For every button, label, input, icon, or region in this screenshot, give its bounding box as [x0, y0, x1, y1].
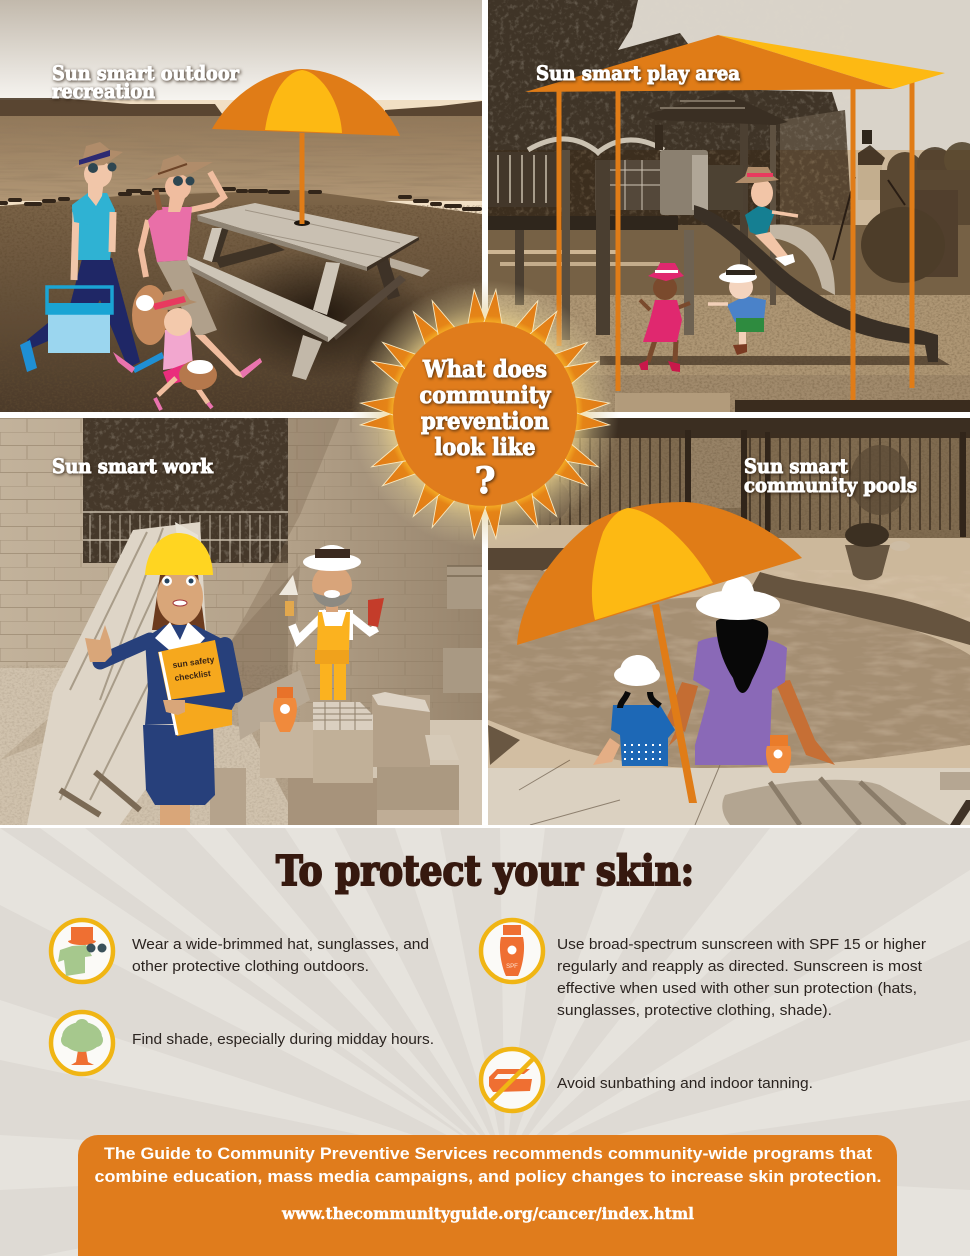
- heading: sun smart community pools: [744, 454, 917, 497]
- banner: community guide recommendation: combine education, mass media campaigns, and policy changes to increase skin protection.: [94, 1168, 882, 1186]
- icon: hat, sunglasses and shirt: [51, 920, 113, 982]
- heading: to protect your skin: To protect your skin:: [276, 847, 694, 895]
- illustration: family with cooler and basket: [20, 142, 262, 410]
- heading: sun smart community pools: community pools: [744, 473, 917, 497]
- text: use sunscreen: [557, 937, 926, 1019]
- text: use sunscreen: regularly and reapply as directed. Sunscreen is most: [557, 959, 922, 975]
- heading: sun smart play area: Sun smart play area: [536, 61, 740, 85]
- illustration: playground structure: [488, 92, 938, 362]
- illustration: woman with hard hat and checklist: sun safety: [172, 654, 215, 670]
- sun badge: what does community prevention look like: prevention: [421, 408, 549, 435]
- heading: sun smart community pools: Sun smart: [744, 454, 849, 478]
- illustration: mother and child under umbrella: [517, 502, 835, 803]
- text: use sunscreen: Use broad-spectrum sunscreen with SPF 15 or higher: [557, 937, 926, 953]
- illustration: orange shade canopy with poles: [525, 35, 945, 400]
- text: wear protective clothing second line: other protective clothing outdoors.: [132, 959, 369, 975]
- panel: sun smart work: [0, 417, 482, 825]
- banner: community guide recommendation: [78, 1135, 897, 1256]
- text: avoid tanning: Avoid sunbathing and indoor tanning.: [557, 1076, 813, 1092]
- illustration: children playing: [639, 167, 798, 372]
- icon: sunscreen bottle: [481, 920, 543, 982]
- icon: shade tree: [51, 1012, 113, 1074]
- panel: sun smart community pools: [470, 418, 970, 825]
- illustration: construction worker: [279, 545, 384, 700]
- icon: sunscreen bottle: SPF: [506, 964, 518, 970]
- photo: stacked clay bricks: [210, 692, 459, 825]
- photo: lake and lawn background: [0, 0, 482, 412]
- heading: sun smart work: Sun smart work: [52, 454, 214, 478]
- heading: sun smart outdoor recreation: recreation: [52, 79, 155, 103]
- banner: community guide recommendation: www.thecommunityguide.org/cancer/index.html: [281, 1204, 694, 1223]
- text: find shade: Find shade, especially during midday hours.: [132, 1032, 434, 1048]
- text: wear protective clothing: Wear a wide-brimmed hat, sunglasses, and: [132, 937, 429, 953]
- sun badge: what does community prevention look like: ?: [474, 460, 496, 502]
- heading: sun smart outdoor recreation: Sun smart outdoor: [52, 61, 239, 85]
- heading: sun smart outdoor recreation: [52, 61, 239, 103]
- photo: playground background: [488, 0, 970, 412]
- banner: community guide recommendation: The Guide to Community Preventive Services recommends community-wide programs that: [104, 1145, 873, 1163]
- illustration: sunscreen bottle: [273, 687, 297, 732]
- section: to protect your skin: [0, 828, 970, 1256]
- icon: no tanning bed: [481, 1049, 543, 1111]
- photo: pool and fence background: [470, 418, 970, 825]
- panel: sun smart outdoor recreation: [0, 0, 482, 412]
- text: use sunscreen: effective when used with other sun protection (hats,: [557, 981, 917, 997]
- panel: sun smart play area: [488, 0, 970, 412]
- illustration: picnic table: [185, 203, 430, 380]
- sun badge: what does community prevention look like: community: [420, 382, 551, 409]
- sun badge: what does community prevention look like: What does: [422, 356, 547, 383]
- illustration: woman with hard hat and checklist: [85, 533, 237, 825]
- sun badge: what does community prevention look like: look like: [434, 434, 536, 461]
- text: use sunscreen: sunglasses, protective clothing, shade).: [557, 1003, 832, 1019]
- photo: construction site background: [0, 417, 482, 825]
- illustration: picnic umbrella: [212, 69, 400, 224]
- illustration: woman with hard hat and checklist: checklist: [174, 668, 211, 683]
- sun badge: what does community prevention look like: [351, 280, 619, 548]
- photo: folded lounge chairs: [722, 772, 970, 825]
